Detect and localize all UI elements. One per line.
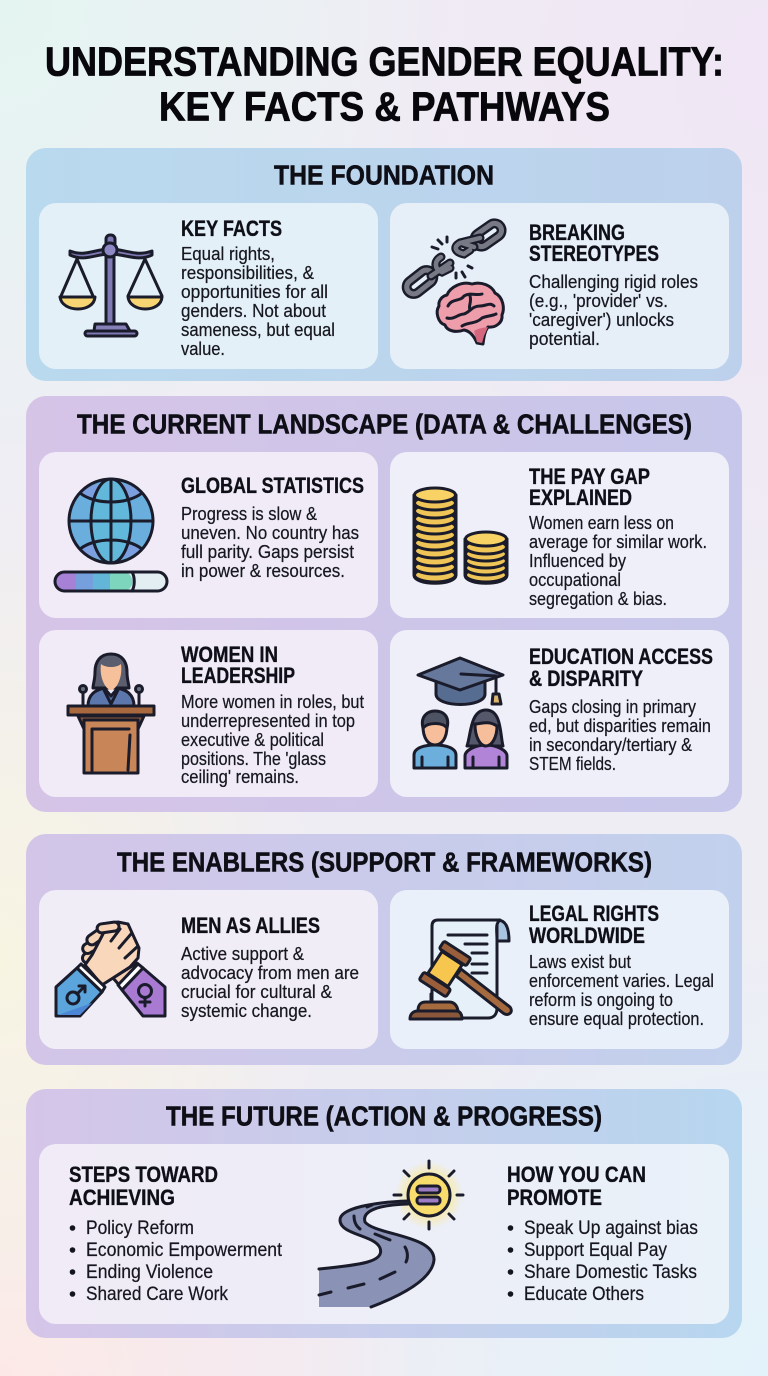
panel: the current landscape — [26, 396, 742, 812]
text: women in leadership — [181, 642, 364, 787]
list: steps toward achieving: Economic Empowerment — [86, 1240, 283, 1261]
text: the pay gap: Influenced by — [529, 551, 626, 571]
text: education access: STEM fields. — [529, 754, 616, 774]
card: breaking stereotypes — [390, 203, 729, 369]
text: global statistics: Progress is slow & — [181, 504, 317, 524]
text: men as allies: crucial for cultural & — [181, 982, 332, 1002]
text: the pay gap: average for similar work. — [529, 532, 707, 552]
icon: gavel and document — [410, 920, 511, 1019]
list: steps toward achieving — [69, 1162, 283, 1305]
text: breaking stereotypes — [529, 220, 698, 349]
card: men as allies — [39, 890, 378, 1049]
list: steps toward achieving: STEPS TOWARD — [69, 1162, 218, 1187]
text: the pay gap: occupational — [529, 570, 621, 590]
icon: female symbol — [138, 984, 152, 1006]
text: the pay gap: segregation & bias. — [529, 589, 667, 609]
heading: the current landscape: THE CURRENT LANDSCAPE (DATA & CHALLENGES) — [77, 408, 692, 440]
list: how you can promote: Support Equal Pay — [524, 1240, 667, 1261]
card: key facts — [39, 203, 378, 369]
icon: graduation cap and students — [414, 658, 507, 768]
text: the pay gap: THE PAY GAP — [529, 464, 650, 489]
text: key facts: value. — [181, 339, 225, 359]
card: women in leadership — [39, 630, 378, 797]
text: men as allies: systemic change. — [181, 1001, 312, 1021]
text: legal rights: Laws exist but — [529, 952, 631, 972]
text: key facts: KEY FACTS — [181, 216, 282, 241]
text: the pay gap: Women earn less on — [529, 513, 674, 533]
list: how you can promote — [507, 1162, 698, 1305]
text: legal rights: enforcement varies. Legal — [529, 971, 714, 991]
text: men as allies: MEN AS ALLIES — [181, 913, 320, 938]
list: steps toward achieving: Ending Violence — [86, 1262, 213, 1283]
text: legal rights: WORLDWIDE — [529, 923, 645, 948]
icon: male symbol — [67, 986, 85, 1004]
text: global statistics — [181, 473, 364, 581]
icon: brain — [437, 283, 503, 344]
list: steps toward achieving: ACHIEVING — [69, 1185, 175, 1210]
title: KEY FACTS & PATHWAYS — [159, 84, 610, 130]
text: key facts: sameness, but equal — [181, 320, 335, 340]
list: how you can promote: HOW YOU CAN — [507, 1162, 646, 1187]
text: key facts: Equal rights, — [181, 244, 275, 264]
text: key facts: opportunities for all — [181, 282, 328, 302]
text: breaking stereotypes: BREAKING — [529, 220, 625, 245]
text: global statistics: full parity. Gaps persist — [181, 542, 354, 562]
icon: clasped hands with gender sleeves — [56, 922, 165, 1016]
text: breaking stereotypes: STEREOTYPES — [529, 241, 659, 266]
card: global statistics — [39, 452, 378, 618]
icon: coin stacks — [414, 488, 507, 583]
panel: the foundation — [26, 148, 742, 381]
icon: winding road to equality sun — [319, 1161, 463, 1307]
heading: the future: THE FUTURE (ACTION & PROGRESS) — [166, 1100, 602, 1132]
list: how you can promote: Educate Others — [524, 1284, 644, 1305]
icon: woman at podium — [68, 654, 154, 773]
text: legal rights — [529, 901, 714, 1029]
text: key facts: responsibilities, & — [181, 263, 314, 283]
icon: globe with progress bar — [55, 479, 167, 591]
text: legal rights: ensure equal protection. — [529, 1009, 704, 1029]
text: global statistics: GLOBAL STATISTICS — [181, 473, 364, 498]
text: global statistics: uneven. No country has — [181, 523, 359, 543]
text: breaking stereotypes: 'caregiver') unlocks — [529, 310, 674, 330]
text: women in leadership: LEADERSHIP — [181, 663, 295, 688]
card: education access — [390, 630, 729, 797]
text: breaking stereotypes: (e.g., 'provider' vs. — [529, 291, 668, 311]
list: how you can promote: PROMOTE — [507, 1185, 602, 1210]
text: breaking stereotypes: potential. — [529, 329, 600, 349]
text: education access — [529, 644, 713, 774]
text: legal rights: LEGAL RIGHTS — [529, 901, 659, 926]
text: education access: ed, but disparities remain — [529, 716, 711, 736]
heading: the foundation: THE FOUNDATION — [274, 160, 494, 190]
text: men as allies: advocacy from men are — [181, 963, 359, 983]
card: future actions — [39, 1144, 729, 1324]
text: education access: & DISPARITY — [529, 666, 643, 691]
text: women in leadership: positions. The 'glass — [181, 749, 326, 769]
text: men as allies — [181, 913, 359, 1021]
list: how you can promote: Speak Up against bias — [524, 1218, 698, 1239]
text: men as allies: Active support & — [181, 944, 304, 964]
text: global statistics: in power & resources. — [181, 561, 345, 581]
text: breaking stereotypes: Challenging rigid roles — [529, 272, 698, 292]
heading: the enablers: THE ENABLERS (SUPPORT & FRAMEWORKS) — [117, 846, 652, 878]
text: women in leadership: underrepresented in top — [181, 711, 355, 731]
panel: the enablers — [26, 834, 742, 1065]
panel: the future — [26, 1089, 742, 1338]
text: women in leadership: executive & political — [181, 730, 324, 750]
text: education access: Gaps closing in primary — [529, 697, 696, 717]
text: education access: in secondary/tertiary & — [529, 735, 692, 755]
list: steps toward achieving: Policy Reform — [86, 1218, 194, 1239]
list: steps toward achieving: Shared Care Work — [86, 1284, 228, 1305]
text: key facts — [181, 216, 335, 359]
text: women in leadership: ceiling' remains. — [181, 767, 299, 787]
title — [45, 38, 724, 130]
icon: broken chain — [404, 221, 504, 344]
icon: balance scales — [60, 235, 162, 336]
text: legal rights: reform is ongoing to — [529, 990, 673, 1010]
text: key facts: genders. Not about — [181, 301, 326, 321]
list: how you can promote: Share Domestic Tasks — [524, 1262, 697, 1283]
text: the pay gap: EXPLAINED — [529, 485, 632, 510]
text: education access: EDUCATION ACCESS — [529, 644, 713, 669]
text: women in leadership: WOMEN IN — [181, 642, 278, 667]
card: legal rights — [390, 890, 729, 1049]
text: the pay gap — [529, 464, 707, 609]
text: women in leadership: More women in roles, but — [181, 692, 364, 712]
card: the pay gap — [390, 452, 729, 618]
